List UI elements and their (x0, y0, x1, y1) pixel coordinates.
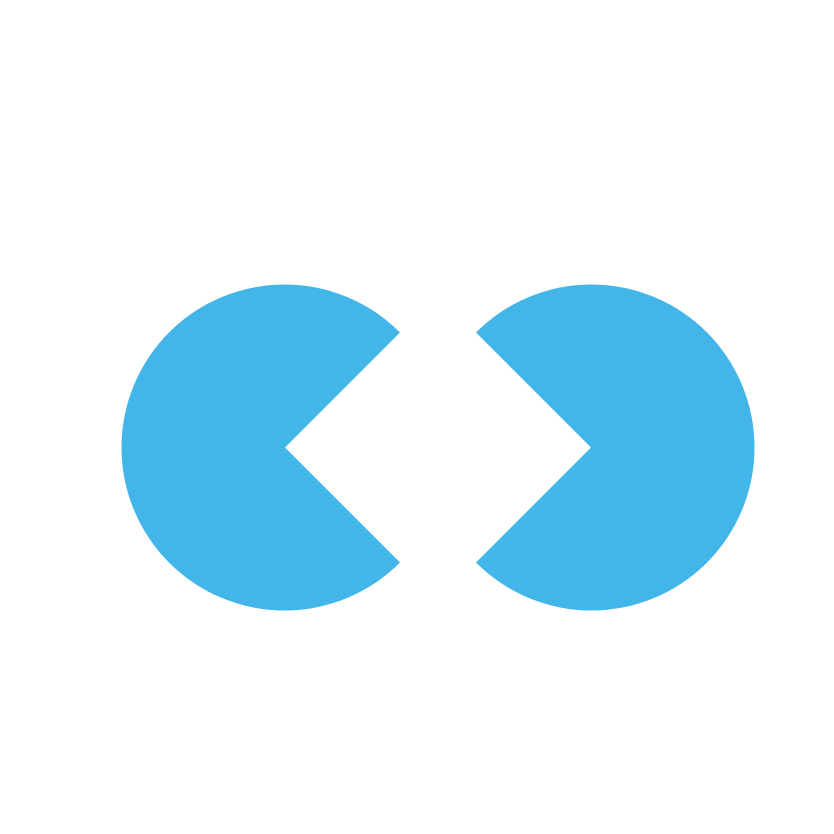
left circle with right-facing wedge cut-out (121, 284, 400, 610)
right circle with left-facing wedge cut-out (476, 284, 755, 610)
